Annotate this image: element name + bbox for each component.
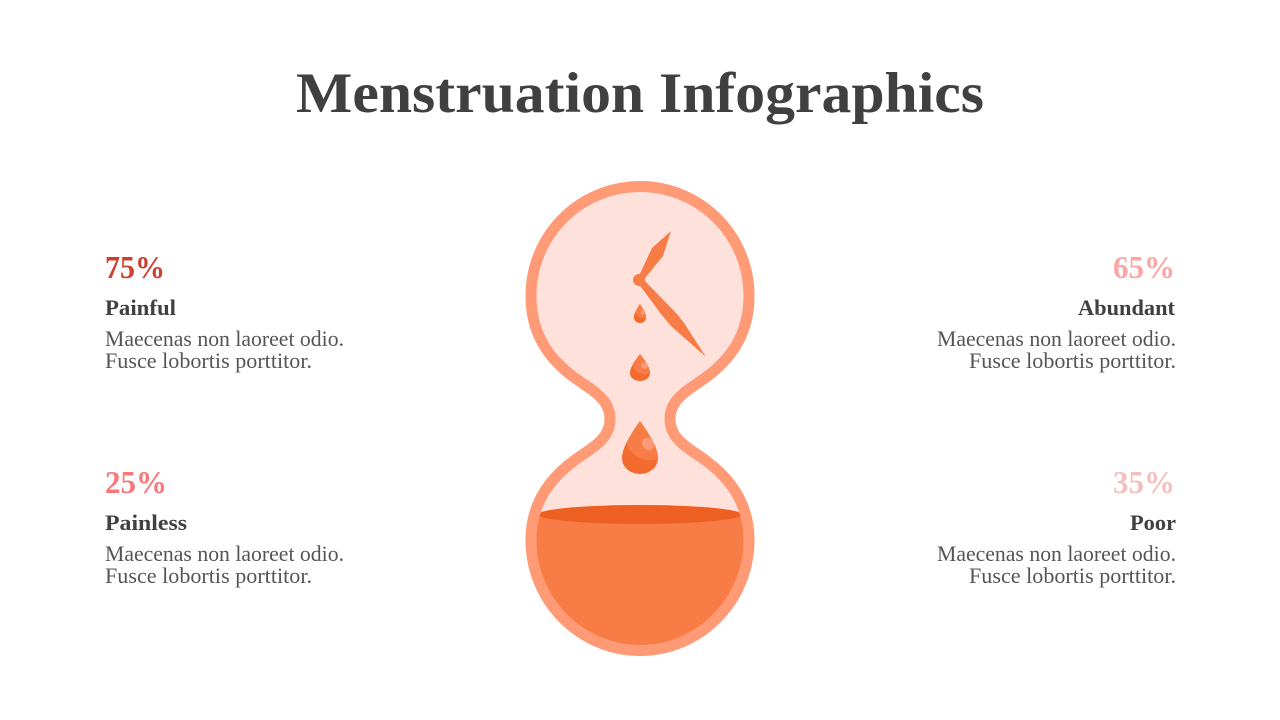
hourglass outline <box>531 186 749 650</box>
description: abundant: Maecenas non laoreet odio. <box>937 326 1176 351</box>
panel: poor <box>937 464 1176 588</box>
icon: large drop <box>622 421 658 474</box>
description: painless: Maecenas non laoreet odio. <box>105 541 344 566</box>
stat: 65%: 65% <box>1113 249 1175 285</box>
liquid pool <box>536 505 744 645</box>
stat: 25%: 25% <box>105 464 167 500</box>
label: abundant: Abundant <box>1078 295 1176 320</box>
description: abundant <box>937 326 1176 373</box>
icon: small drop <box>634 304 646 324</box>
stat: 35%: 35% <box>1113 464 1175 500</box>
clock hands <box>633 231 706 357</box>
label: painful: Painful <box>105 295 176 320</box>
icon: medium drop <box>630 354 650 381</box>
label: painless: Painless <box>105 510 187 535</box>
description: abundant: Fusce lobortis porttitor. <box>969 348 1176 373</box>
panel: painful <box>105 249 344 373</box>
description: poor: Maecenas non laoreet odio. <box>937 541 1176 566</box>
description: painful: Fusce lobortis porttitor. <box>105 348 312 373</box>
description: painful <box>105 326 344 373</box>
description: painless <box>105 541 344 588</box>
stat: 75%: 75% <box>105 249 165 285</box>
description: poor <box>937 541 1176 588</box>
hourglass illustration <box>520 186 760 659</box>
description: painful: Maecenas non laoreet odio. <box>105 326 344 351</box>
panel: abundant <box>937 249 1176 373</box>
description: painless: Fusce lobortis porttitor. <box>105 563 312 588</box>
title: Menstruation Infographics <box>296 62 984 125</box>
panel: painless <box>105 464 344 588</box>
hourglass glass fill <box>531 186 749 650</box>
label: poor: Poor <box>1130 510 1176 535</box>
description: poor: Fusce lobortis porttitor. <box>969 563 1176 588</box>
